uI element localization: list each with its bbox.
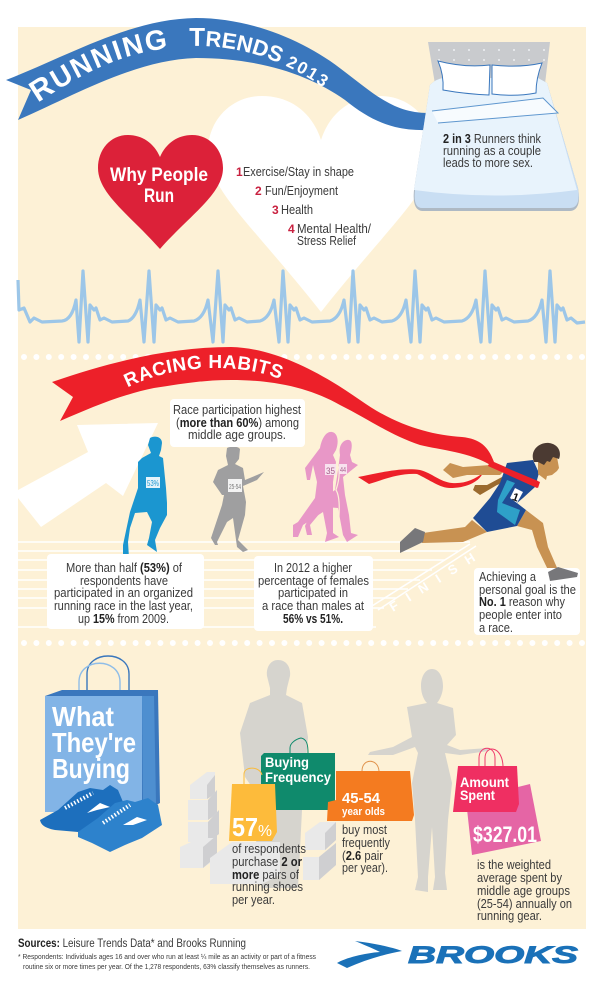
callout: females vs males [254, 556, 373, 631]
yellow bag: 57 percent: % [258, 823, 272, 840]
pink female runners silhouette: 44 [340, 467, 346, 474]
text: weighted average spent: middle age groups [477, 884, 570, 898]
green bag: buying frequency [261, 738, 335, 810]
gray runner silhouette [211, 447, 264, 552]
illustration: bed with statistic: leads to more sex. [443, 156, 533, 170]
text: weighted average spent: (25-54) annually on [477, 897, 572, 911]
list: reasons to run: Exercise/Stay in shape [243, 165, 354, 179]
orange bag: 45-54 year olds: year olds [342, 806, 385, 818]
blue shopping bag: what they're buying: They're [52, 727, 136, 758]
front shoe over callout [548, 567, 578, 581]
upper dotted divider [24, 354, 585, 360]
callout: more than half: participated in an organized [54, 586, 193, 600]
title banner: 2013 [286, 56, 328, 86]
woman silhouette [368, 669, 488, 892]
callout: more than half: respondents have [80, 574, 168, 588]
back arm [473, 477, 505, 495]
white upward arrow [18, 423, 158, 527]
blue shopping bag: what they're buying: Buying [52, 753, 130, 784]
title banner: RUNNING [28, 30, 166, 102]
yellow bag: 57 percent: 57 [232, 812, 258, 842]
list: reasons to run: Fun/Enjoyment [265, 184, 338, 198]
red-pink bag: amount spent: Spent [460, 787, 495, 803]
callout: personal goal: personal goal is the [479, 583, 576, 597]
text: buy most frequently [342, 823, 391, 875]
callout: middle age groups [170, 399, 305, 447]
callout: females vs males: percentage of females [258, 574, 369, 588]
callout: middle age groups: (more than 60%) among [176, 416, 299, 430]
text: weighted average spent: running gear. [477, 909, 542, 923]
tape across chest [488, 461, 538, 488]
list: reasons to run: 2 [255, 184, 262, 198]
blue runner silhouette [123, 437, 167, 558]
green bag: buying frequency: Buying [265, 754, 309, 770]
torso and shorts [473, 460, 539, 532]
yellow bag: 57 percent [229, 768, 277, 842]
list: reasons to run: Mental Health/ [297, 222, 371, 236]
back leg [422, 520, 487, 543]
pink female runners silhouette: 35 [326, 466, 335, 476]
text: weighted average spent: average spent by [477, 871, 563, 885]
gray runner silhouette: 25-54 [229, 484, 241, 491]
list: reasons to run: 1 [236, 165, 243, 179]
list: reasons to run: Health [281, 203, 313, 217]
red heart: why people run [98, 135, 223, 249]
track lines and finish [18, 542, 476, 627]
text: buy most frequently: frequently [342, 836, 391, 850]
lead runner breaking the tape: 1 [510, 491, 520, 505]
list: reasons to run: 3 [272, 203, 279, 217]
callout: middle age groups: Race participation highest [173, 403, 301, 417]
title banner: TRENDS [189, 28, 283, 62]
pink tilted bag: amount: $327.01 [473, 822, 537, 847]
blue shopping bag: what they're buying: What [52, 701, 114, 732]
callout: personal goal [474, 568, 580, 635]
callout: personal goal: Achieving a [479, 570, 536, 584]
text: 57 percent of respondents: running shoes [232, 880, 303, 894]
red heart: why people run: Why People [110, 165, 208, 186]
text: 57 percent of respondents [232, 842, 306, 907]
lower dotted divider [24, 640, 585, 646]
heartbeat line [18, 271, 585, 342]
title banner [6, 18, 426, 130]
green bag: buying frequency: Frequency [265, 769, 331, 785]
blue shopping bag: what they're buying [40, 656, 162, 852]
front arm [443, 463, 505, 478]
callout: more than half [47, 554, 204, 629]
callout: more than half: running race in the last year, [54, 599, 193, 613]
pink female runners silhouette [293, 432, 358, 542]
back shoe [400, 528, 425, 553]
callout: females vs males: a race than males at [262, 599, 364, 613]
text: 57 percent of respondents: of respondents [232, 842, 306, 856]
red-pink bag: amount spent: Amount [460, 774, 509, 790]
callout: more than half: up 15% from 2009. [78, 612, 169, 626]
racing habits banner [52, 347, 540, 488]
pink tilted bag: amount [466, 784, 541, 855]
text: buy most frequently: buy most [342, 823, 387, 837]
Brooks logo: BROOKS [408, 942, 578, 969]
bib number [510, 488, 523, 503]
head [538, 450, 559, 480]
orange bag: 45-54 year olds: 45-54 [342, 790, 381, 807]
racing habits banner: RACING HABITS [123, 354, 283, 387]
list: reasons to run: 4 [288, 222, 295, 236]
red heart: why people run: Run [144, 186, 174, 207]
list: reasons to run: Stress Relief [297, 234, 356, 248]
illustration: bed with statistic [414, 42, 579, 211]
lead runner breaking the tape [400, 443, 560, 572]
sources: Sources: Leisure Trends Data* and Brooks Running [18, 938, 246, 950]
Brooks logo [337, 941, 578, 969]
callout: personal goal: a race. [479, 621, 513, 635]
shoe box stacks [180, 772, 336, 884]
callout: personal goal: No. 1 reason why [479, 595, 566, 609]
sources: * Respondents: Individuals ages 16 and over who run at least ¼ mile as an activity or part of a fitness [18, 954, 316, 961]
white heart [208, 96, 434, 312]
text: buy most frequently: (2.6 pair [342, 849, 383, 863]
callout: females vs males: In 2012 a higher [274, 561, 352, 575]
callout: females vs males: participated in [278, 586, 348, 600]
sources [18, 938, 316, 971]
pair of running shoes [40, 785, 162, 852]
illustration: bed with statistic: 2 in 3 Runners think [443, 132, 542, 146]
callout: more than half: More than half (53%) of [66, 561, 182, 575]
text: 57 percent of respondents: purchase 2 or [232, 855, 302, 869]
callout: females vs males: 56% vs 51%. [283, 612, 343, 626]
orange bag: 45-54 year olds [327, 761, 414, 821]
text: buy most frequently: per year). [342, 861, 388, 875]
blue runner silhouette: 53% [147, 479, 159, 488]
front leg [517, 510, 558, 572]
finish label on track: FINISH [387, 550, 478, 615]
sources: routine six or more times per year. Of the 1,278 respondents, 63% classify themselves as runners. [23, 964, 310, 971]
list: reasons to run [236, 165, 371, 248]
text: 57 percent of respondents: per year. [232, 893, 275, 907]
red-pink bag: amount spent [453, 748, 519, 812]
text: 57 percent of respondents: more pairs of [232, 868, 299, 882]
callout: middle age groups: middle age groups. [188, 428, 286, 442]
text: weighted average spent: is the weighted [477, 858, 551, 872]
text: weighted average spent [477, 858, 572, 923]
man silhouette [240, 660, 308, 888]
illustration: bed with statistic: running as a couple [443, 144, 541, 158]
callout: personal goal: people enter into [479, 608, 562, 622]
